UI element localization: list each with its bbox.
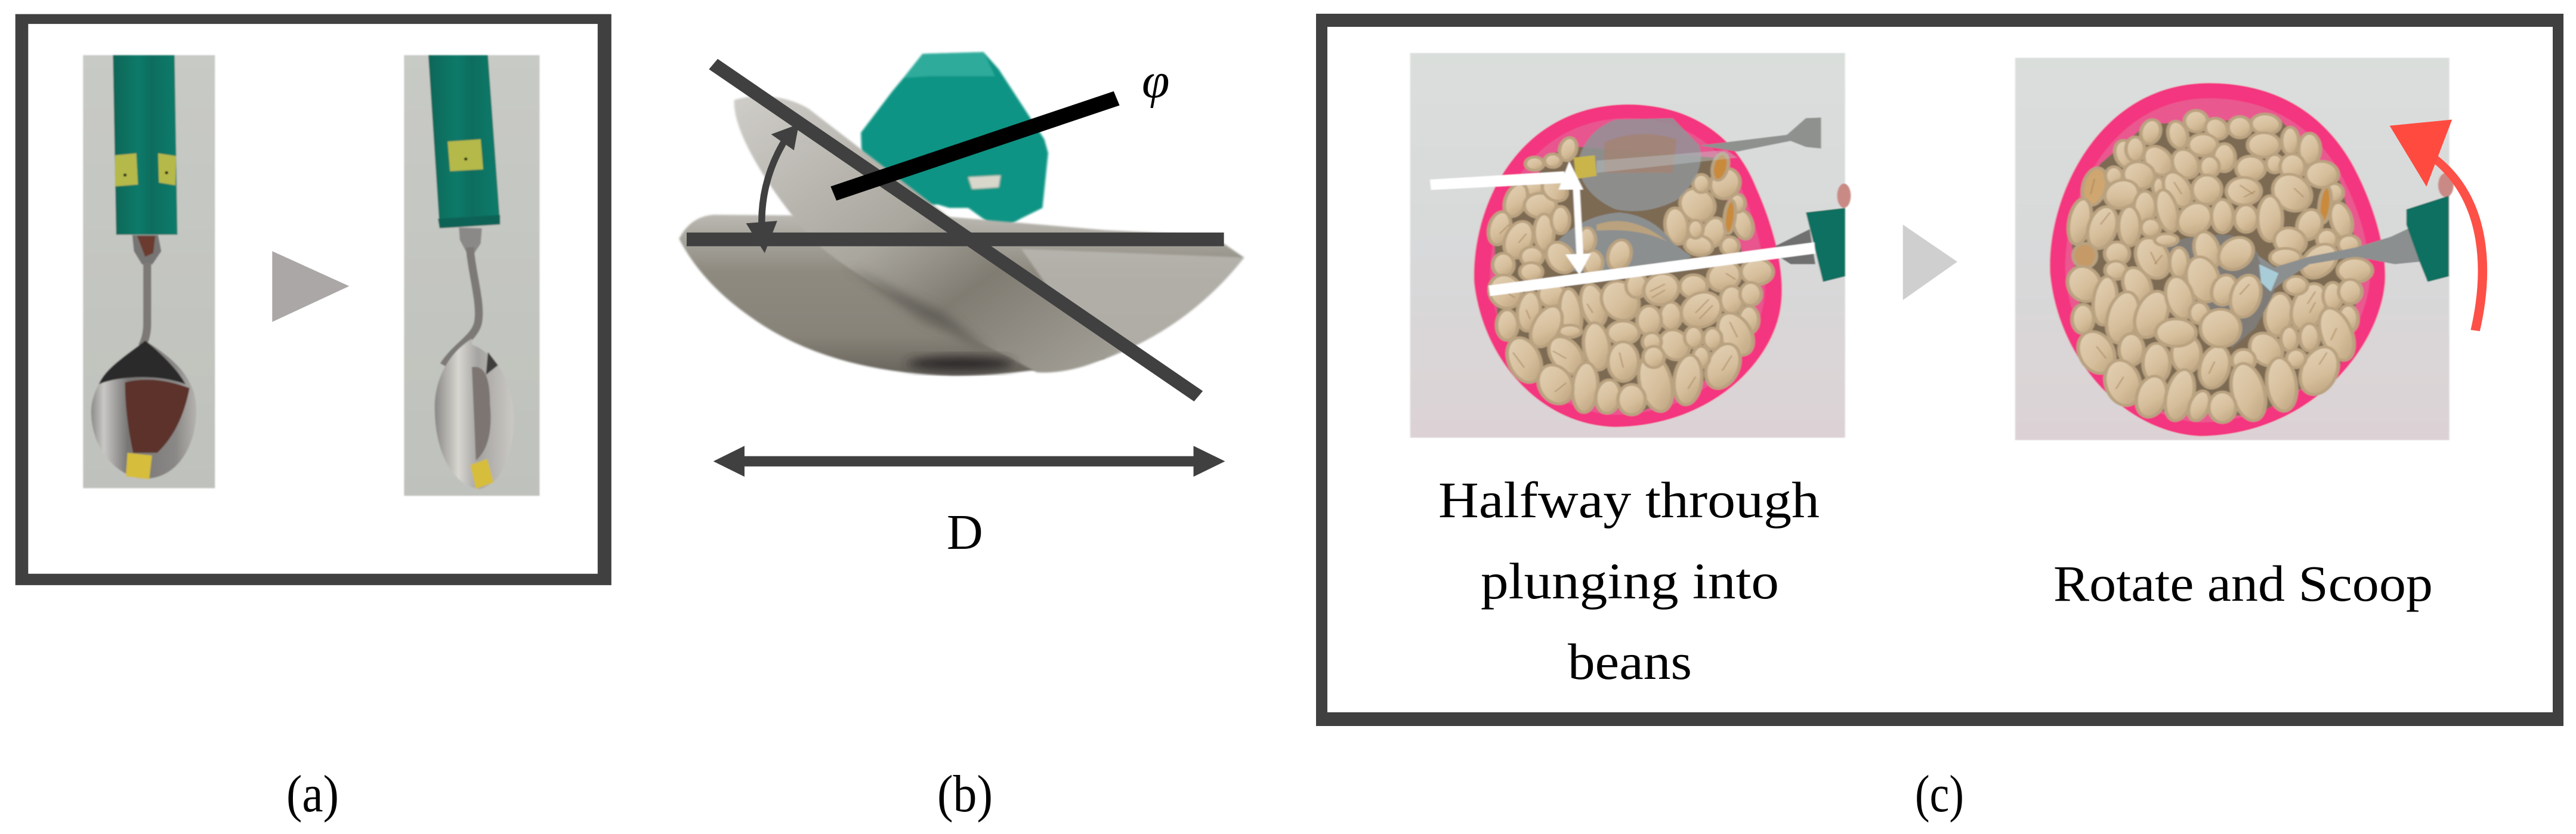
caption (a): (a) xyxy=(286,765,339,823)
tape marker on handle xyxy=(447,139,483,171)
step label: halfway through plunging into beans: Halfway through xyxy=(1438,471,1820,529)
step label: halfway through plunging into beans: beans xyxy=(1568,633,1692,690)
photo: straight spoon xyxy=(83,55,215,488)
icon: green handle section xyxy=(861,52,1048,227)
caption (b): (b) xyxy=(937,765,993,823)
label: phi: φ xyxy=(1142,53,1169,109)
caption (c): (c) xyxy=(1915,765,1964,823)
icon: spoon neck xyxy=(132,235,161,346)
beans in bowl xyxy=(2064,110,2372,423)
icon: bent spoon neck xyxy=(444,227,482,365)
icon: pink bowl xyxy=(1474,104,1782,427)
beans in bowl xyxy=(1485,137,1773,415)
panel: (c) scooping procedure xyxy=(1316,14,2563,726)
bean surface cracks xyxy=(2090,179,2337,389)
icon: submerged spoon bowl xyxy=(1541,212,1692,276)
arrow: diameter D xyxy=(714,446,1225,477)
measurement: white lines and double arrow xyxy=(1430,161,1815,296)
arrow: rotation direction xyxy=(2390,120,2482,330)
tilted reference line xyxy=(714,64,1199,396)
photo: rotate and scoop xyxy=(2015,58,2454,440)
icon: bent spoon bowl xyxy=(435,339,514,489)
step label: halfway through plunging into beans: plunging into xyxy=(1481,552,1779,610)
icon: hand and green handle xyxy=(1775,184,1851,282)
icon: spoon bowl xyxy=(91,341,196,478)
panel frame c xyxy=(1316,14,2563,726)
horizontal reference line xyxy=(687,227,1224,251)
tape marker on spoon xyxy=(470,459,493,489)
tape marker on spoon xyxy=(126,453,152,480)
normal line xyxy=(833,98,1117,193)
panel: (b) spoon tilt angle diagram xyxy=(679,52,1244,560)
icon: tilted spoon bowl xyxy=(734,96,1128,373)
beans over spoon xyxy=(2130,230,2265,347)
photo: spoon plunging into beans xyxy=(1410,53,1851,438)
icon: spoon under beans xyxy=(2163,228,2420,348)
arrow: next step xyxy=(1903,225,1957,300)
tape markers on handle xyxy=(115,153,176,187)
bean surface cracks xyxy=(1500,225,1737,392)
icon: horizontal spoon bowl xyxy=(679,215,1244,376)
arrow: angle arc xyxy=(746,124,799,253)
label: D: D xyxy=(947,505,983,560)
icon: green handle xyxy=(428,55,500,227)
icon: pink bowl xyxy=(2050,83,2385,436)
step label: halfway through plunging into beans xyxy=(1438,471,1820,690)
photo: bent spoon xyxy=(404,55,539,496)
tape marker on spoon xyxy=(1574,155,1596,179)
panel frame a xyxy=(16,14,611,585)
arrow: bending direction xyxy=(272,251,349,322)
panel: (a) spoon before and after bending xyxy=(16,14,611,585)
icon: hand and green handle xyxy=(2407,173,2454,282)
step label: rotate and scoop: Rotate and Scoop xyxy=(2053,555,2433,612)
icon: green handle xyxy=(113,55,177,235)
icon: ghost spoon overlay xyxy=(1577,118,1821,211)
